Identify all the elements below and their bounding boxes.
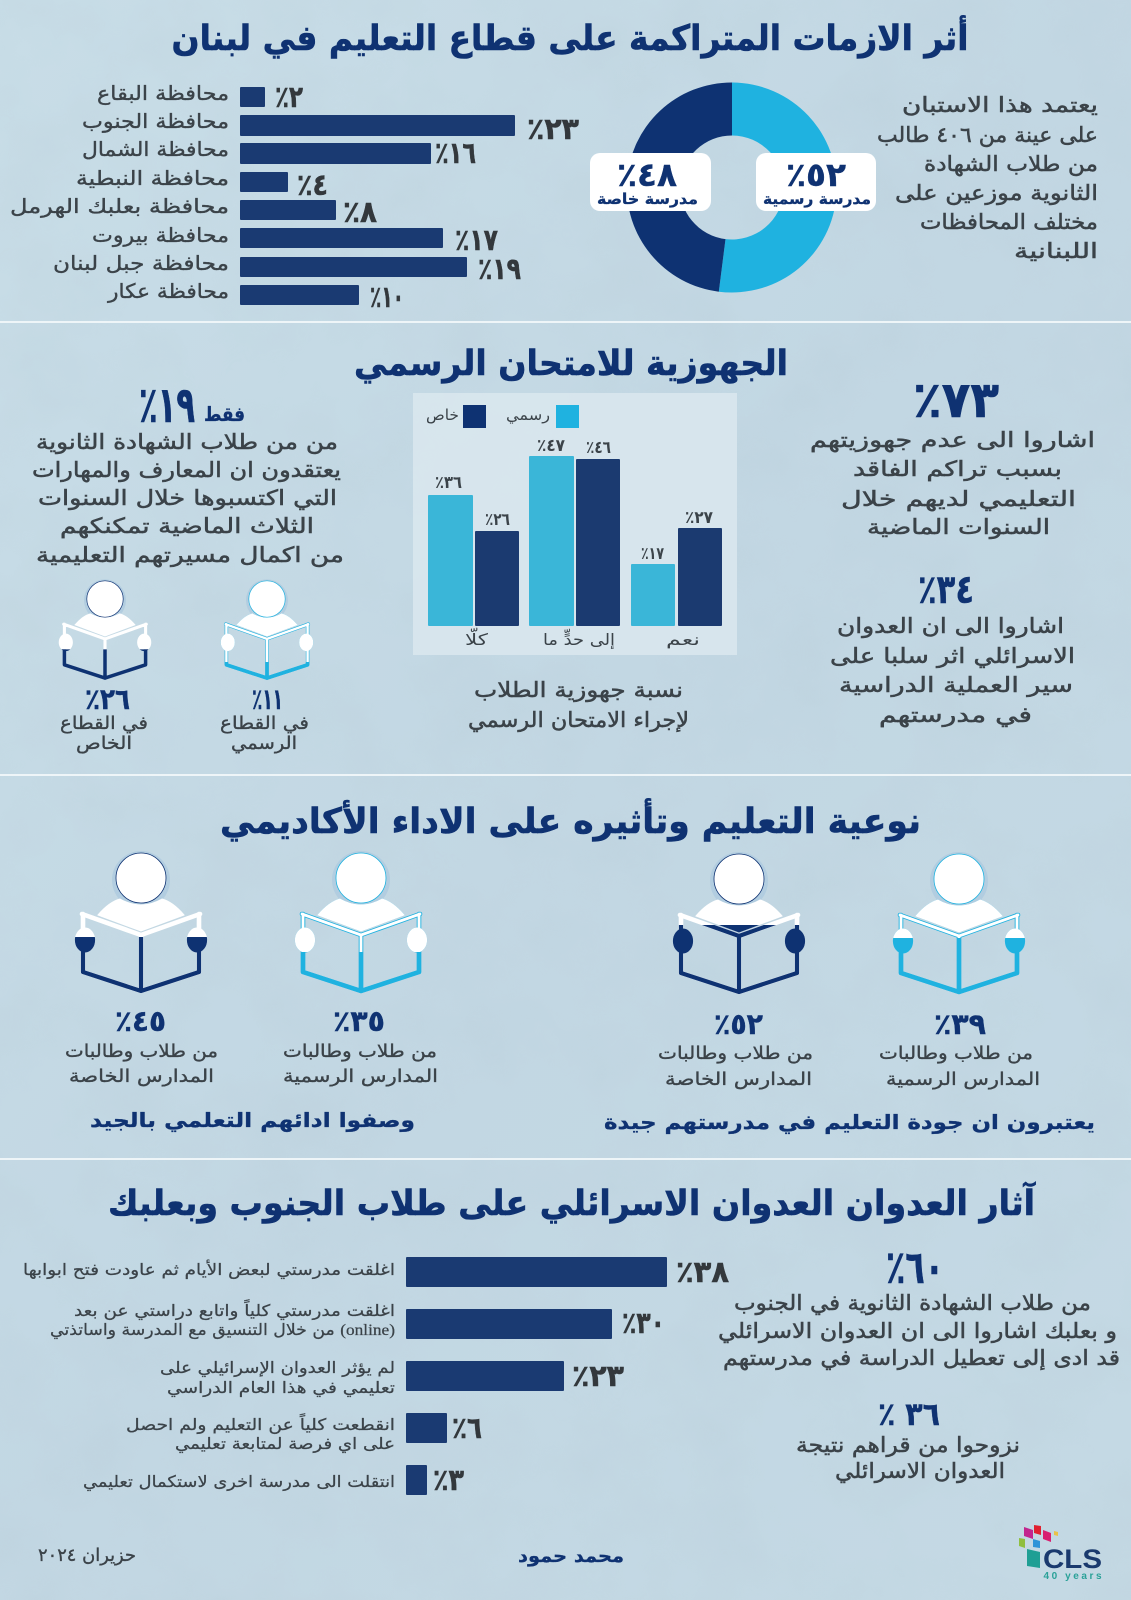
- bar chart: school impact: ٣٪: [433, 1463, 464, 1498]
- text block: survey description: مختلف المحافظات: [920, 210, 1098, 234]
- chart caption: لإجراء الامتحان الرسمي: [468, 708, 689, 732]
- grouped bar chart: readiness: ٤٦٪: [586, 438, 611, 458]
- stat: 60%: و بعلبك اشاروا الى ان العدوان الاسرائلي: [718, 1319, 1117, 1343]
- bar chart: school impact: ٣٨٪: [676, 1255, 729, 1290]
- stat: 73%: التعليمي لديهم خلال: [841, 487, 1076, 512]
- stat: 34%: الاسرائلي اثر سلبا على: [830, 644, 1075, 668]
- stat: 73%: [810, 371, 1095, 539]
- bar chart: governorates: ١٠٪: [370, 280, 404, 315]
- grouped bar chart: readiness: كلّا: [465, 626, 489, 649]
- bar chart: governorates: محافظة النبطية: [76, 166, 229, 190]
- stat: 35%: من طلاب وطالبات: [283, 1041, 437, 1062]
- callout: private school 48%: [590, 153, 711, 211]
- callout: private school 48%: ٤٨٪: [617, 155, 677, 194]
- stat: 45%: ٤٥٪: [115, 1004, 166, 1038]
- grouped bar chart: readiness: ٢٧٪: [685, 508, 714, 528]
- stat: 34%: سير العملية الدراسية: [839, 673, 1073, 697]
- stat: 73%: اشاروا الى عدم جهوزيتهم: [810, 428, 1095, 453]
- grouped bar chart: readiness: ١٧٪: [641, 544, 664, 564]
- bar chart: governorates: محافظة البقاع: [97, 81, 229, 105]
- grouped bar chart: readiness: نعم: [666, 630, 700, 649]
- bar chart: governorates: [10, 80, 579, 315]
- label: public 11%: في القطاع: [220, 713, 309, 734]
- panel: education quality: [65, 798, 1095, 1135]
- bar chart: school impact: لم يؤثر العدوان الإسرائيلي على: [160, 1358, 395, 1378]
- bar chart: school impact: اغلقت مدرستي لبعض الأيام ثم عاودت فتح ابوابها: [23, 1259, 395, 1280]
- legend: خاص: [426, 406, 459, 424]
- bar chart: school impact: ٦٪: [452, 1411, 482, 1446]
- bar chart: school impact: [23, 1255, 729, 1498]
- icon: reader private sector 26%: [59, 579, 151, 678]
- stat: 45%: [65, 1004, 218, 1087]
- heading: الجهوزية للامتحان الرسمي: [354, 344, 788, 384]
- stat: only 19%: من من طلاب الشهادة الثانوية: [36, 430, 338, 454]
- stat: only 19%: الثلاث الماضية تمكنكهم: [60, 514, 314, 539]
- stat: only 19%: فقط: [204, 402, 245, 426]
- icon: reader 45%: [75, 851, 207, 991]
- stat: 60%: من طلاب الشهادة الثانوية في الجنوب: [734, 1291, 1091, 1315]
- stat: 36%: العدوان الاسرائلي: [835, 1459, 1005, 1483]
- label: private 26%: الخاص: [76, 733, 132, 754]
- bar chart: governorates: ١٩٪: [478, 252, 521, 287]
- grouped bar chart: readiness: إلى حدٍّ ما: [543, 628, 615, 649]
- grouped bar chart: readiness: [413, 393, 737, 655]
- stat: 39%: من طلاب وطالبات: [879, 1043, 1033, 1064]
- bar chart: governorates: محافظة الجنوب: [82, 109, 229, 133]
- title: أثر الازمات المتراكمة على قطاع التعليم في لبنان: [172, 15, 968, 59]
- stat: only 19%: يعتقدون ان المعارف والمهارات: [32, 458, 341, 482]
- stat: 39%: [879, 1007, 1040, 1090]
- logo: CLS 40 years: CLS: [1043, 1544, 1102, 1574]
- label: public 11%: [220, 682, 309, 754]
- stat: 73%: السنوات الماضية: [867, 515, 1050, 539]
- stat: 35%: ٣٥٪: [333, 1004, 385, 1038]
- grouped bar chart: readiness: ٤٧٪: [537, 436, 566, 456]
- bar chart: governorates: محافظة بعلبك الهرمل: [10, 194, 229, 218]
- bar chart: school impact: ٢٣٪: [572, 1359, 624, 1394]
- label: private 26%: [60, 682, 148, 754]
- stat: 52%: [658, 1007, 813, 1090]
- bar chart: governorates: ٤٪: [297, 168, 328, 203]
- summary: quality: يعتبرون ان جودة التعليم في مدرستهم جيدة: [604, 1110, 1095, 1135]
- stat: 52%: ٥٢٪: [714, 1007, 763, 1041]
- stat: 35%: المدارس الرسمية: [283, 1066, 438, 1087]
- icon: reader 39%: [893, 852, 1025, 992]
- stat: 34%: اشاروا الى ان العدوان: [837, 614, 1064, 638]
- logo: CLS 40 years: [1019, 1525, 1102, 1582]
- callout: public school 52%: [756, 153, 876, 211]
- stat: 36%: ٣٦ ٪: [878, 1395, 940, 1433]
- stat: 52%: من طلاب وطالبات: [658, 1043, 813, 1064]
- stat: 35%: [283, 1004, 438, 1087]
- stat: only 19%: [32, 376, 344, 568]
- label: private 26%: في القطاع: [60, 713, 148, 734]
- stat: 73%: ٧٣٪: [913, 371, 999, 429]
- heading: آثار العدوان العدوان الاسرائلي على طلاب الجنوب وبعلبك: [108, 1181, 1036, 1224]
- bar chart: school impact: على اي فرصة لمتابعة تعليمي: [175, 1434, 395, 1454]
- legend: رسمي: [506, 406, 550, 425]
- bar chart: governorates: ١٦٪: [435, 136, 476, 171]
- chart caption: نسبة جهوزية الطلاب: [474, 678, 683, 702]
- stat: 34%: في مدرستهم: [879, 703, 1032, 728]
- stat: 34%: ٣٤٪: [918, 567, 974, 613]
- callout: private school 48%: مدرسة خاصة: [597, 190, 698, 208]
- chart caption: [468, 678, 689, 732]
- bar chart: school impact: تعليمي في هذا العام الدراسي: [167, 1378, 395, 1398]
- stat: 60%: [718, 1240, 1120, 1371]
- bar chart: governorates: محافظة جبل لبنان: [53, 251, 229, 275]
- legend: [426, 405, 579, 428]
- icon: reader public sector 11%: [221, 579, 313, 678]
- callout: public school 52%: ٥٢٪: [786, 155, 846, 194]
- text block: survey description: على عينة من ٤٠٦ طالب: [877, 123, 1098, 147]
- stat: 39%: ٣٩٪: [934, 1007, 986, 1041]
- label: private 26%: ٢٦٪: [85, 682, 130, 716]
- text block: survey description: اللبنانية: [1014, 239, 1098, 263]
- bar chart: governorates: محافظة بيروت: [92, 223, 229, 247]
- bar chart: school impact: (online) من خلال التنسيق مع المدرسة واساتذتي: [50, 1320, 395, 1340]
- panel: exam readiness: [32, 344, 1095, 754]
- text block: survey description: من طلاب الشهادة: [924, 152, 1098, 176]
- stat: only 19%: من اكمال مسيرتهم التعليمية: [36, 543, 344, 568]
- stat: 73%: بسبب تراكم الفاقد: [853, 457, 1062, 482]
- panel: sample and governorates: [10, 15, 1098, 315]
- bar chart: governorates: ٢٪: [275, 80, 303, 115]
- bar chart: governorates: ٨٪: [343, 195, 377, 230]
- stat: 60%: قد ادى إلى تعطيل الدراسة في مدرستهم: [723, 1346, 1120, 1371]
- bar chart: school impact: انتقلت الى مدرسة اخرى لاستكمال تعليمي: [83, 1472, 395, 1492]
- grouped bar chart: readiness: ٢٦٪: [485, 510, 510, 530]
- logo: CLS 40 years: 40 years: [1044, 1571, 1102, 1582]
- stat: 52%: المدارس الخاصة: [665, 1069, 812, 1090]
- text block: survey description: [877, 93, 1098, 263]
- text block: survey description: يعتمد هذا الاستبان: [902, 93, 1098, 117]
- icon: reader 35%: [295, 851, 427, 991]
- date: حزيران ٢٠٢٤: [38, 1545, 136, 1566]
- stat: only 19%: التي اكتسبوها خلال السنوات: [38, 486, 337, 510]
- grouped bar chart: readiness: ٣٦٪: [435, 473, 462, 493]
- summary: performance: وصفوا ادائهم التعلمي بالجيد: [90, 1108, 415, 1133]
- bar chart: school impact: اغلقت مدرستي كلياً واتابع دراستي عن بعد: [74, 1298, 395, 1321]
- stat: 45%: المدارس الخاصة: [69, 1066, 214, 1087]
- bar chart: governorates: محافظة الشمال: [82, 137, 229, 161]
- icon: reader 52%: [673, 852, 805, 992]
- bar chart: governorates: محافظة عكار: [107, 279, 229, 303]
- author: محمد حمود: [518, 1546, 624, 1567]
- donut chart: school type: [590, 82, 876, 292]
- stat: only 19%: ١٩٪: [139, 376, 195, 434]
- label: public 11%: الرسمي: [231, 733, 297, 754]
- bar chart: governorates: ١٧٪: [455, 223, 498, 258]
- callout: public school 52%: مدرسة رسمية: [763, 190, 871, 208]
- bar chart: governorates: ٢٣٪: [527, 112, 579, 147]
- bar chart: school impact: انقطعت كلياً عن التعليم ولم احصل: [126, 1412, 395, 1435]
- stat: 34%: [830, 567, 1075, 728]
- stat: 39%: المدارس الرسمية: [886, 1069, 1040, 1090]
- stat: 36%: [796, 1395, 1020, 1483]
- label: public 11%: ١١٪: [252, 682, 283, 716]
- heading: نوعية التعليم وتأثيره على الاداء الأكاديمي: [220, 798, 921, 842]
- text block: survey description: الثانوية موزعين على: [895, 181, 1098, 205]
- stat: 36%: نزوحوا من قراهم نتيجة: [796, 1433, 1020, 1458]
- stat: 60%: ٦٠٪: [886, 1240, 944, 1294]
- stat: 45%: من طلاب وطالبات: [65, 1041, 218, 1062]
- panel: aggression effects: [23, 1181, 1120, 1582]
- bar chart: school impact: ٣٠٪: [622, 1306, 665, 1341]
